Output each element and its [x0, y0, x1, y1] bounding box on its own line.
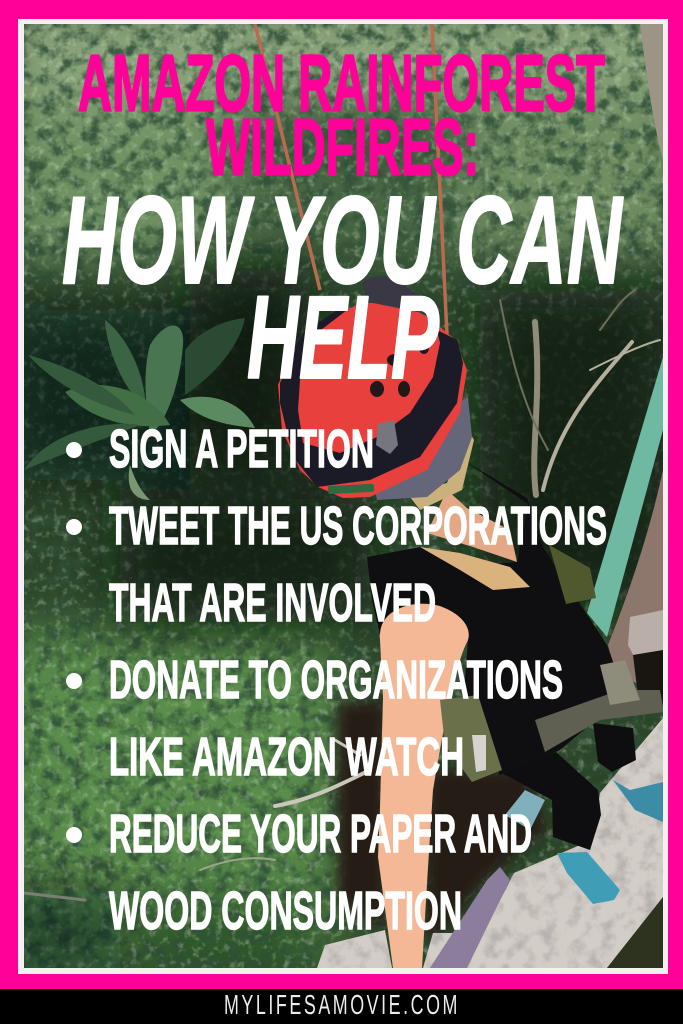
dark hollow at right	[633, 650, 663, 712]
harness and gear	[440, 545, 664, 830]
helmet vent holes	[370, 342, 429, 397]
climber arm	[378, 604, 469, 968]
ponytail	[420, 547, 530, 590]
dark helmet band	[280, 308, 463, 487]
bare tree branches at right	[500, 290, 660, 495]
purple climbing sling	[430, 867, 510, 968]
bullet 3	[66, 650, 563, 787]
climber legs	[500, 723, 636, 850]
log the climber stands on	[317, 718, 663, 968]
dark corner bottom right	[607, 897, 663, 968]
tree trunk top right	[640, 24, 663, 160]
tree bark at right edge	[608, 470, 663, 700]
script heading: How you can help	[62, 172, 624, 404]
bullet 2	[66, 496, 607, 633]
website address: MYLIFESAMOVIE.COM	[224, 989, 460, 1020]
green helmet label	[328, 484, 374, 494]
title line 2: WILDFIRES:	[206, 102, 479, 192]
title: Amazon Rainforest Wildfires	[78, 38, 605, 192]
stone slab at right	[628, 610, 663, 655]
footer bar	[0, 989, 683, 1024]
dark ground below climber	[338, 700, 548, 935]
helmet shell	[278, 303, 467, 498]
blond hair	[410, 436, 474, 510]
bullet 4	[66, 804, 532, 941]
neck and back skin	[427, 490, 517, 562]
climbing ropes	[255, 24, 447, 335]
blue trail shoes	[557, 780, 663, 904]
pale branches bottom left	[24, 740, 370, 900]
bullet 1	[66, 419, 374, 479]
action list	[66, 419, 607, 941]
bullet 2: THAT ARE INVOLVED	[109, 573, 436, 633]
heading line 2: HELP	[247, 272, 439, 404]
black shirt and torso	[367, 460, 625, 775]
helmet buckle	[376, 420, 398, 454]
deep shadow zones of the forest	[0, 270, 670, 970]
bullet 3: LIKE AMAZON WATCH	[109, 727, 464, 787]
teal tarp bundle	[587, 357, 663, 637]
palm fronds at left	[24, 318, 255, 500]
action camera on helmet	[362, 276, 425, 312]
grey helmet strap	[375, 397, 472, 500]
bullet 1: SIGN A PETITION	[109, 419, 374, 479]
red climbing helmet	[278, 303, 467, 498]
